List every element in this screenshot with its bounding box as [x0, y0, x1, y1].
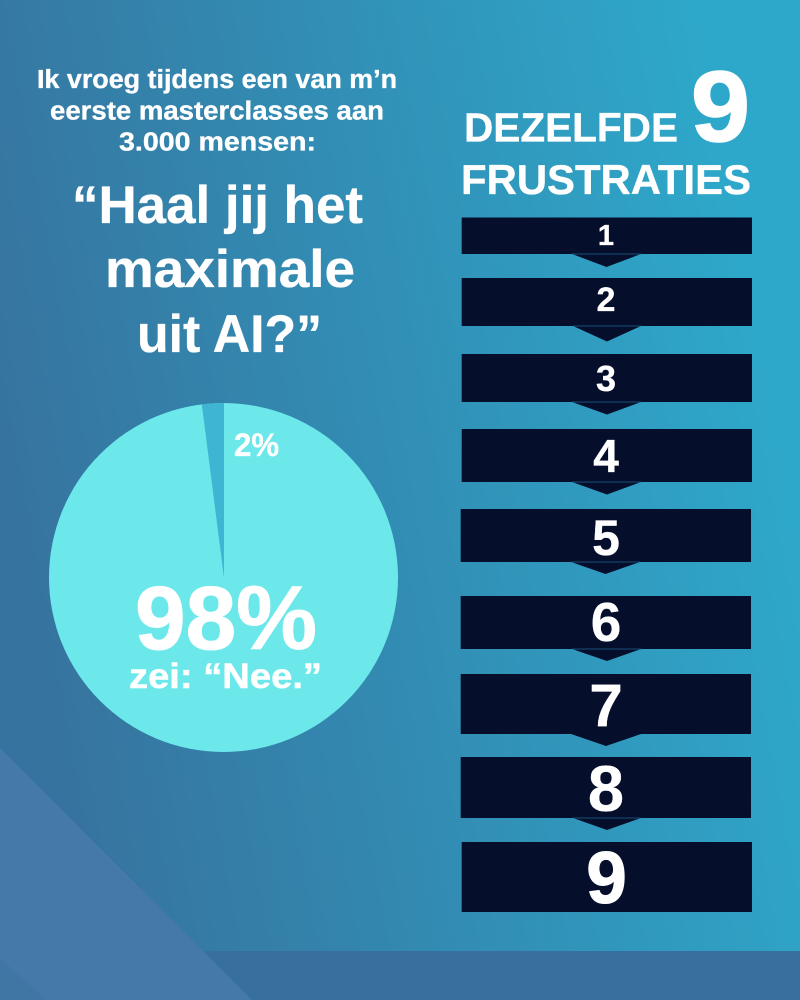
pie slice: 2% [202, 403, 224, 578]
intro text [37, 66, 397, 157]
step 1 [462, 218, 752, 267]
intro text: Ik vroeg tijdens een van m’n [37, 66, 397, 94]
step 6: 6 [591, 591, 621, 653]
step 1: 1 [598, 220, 614, 252]
intro text: 3.000 mensen: [119, 129, 316, 157]
step 3: 3 [596, 358, 616, 399]
headline quote [72, 176, 363, 364]
heading: dezelfde 9 frustraties [461, 51, 751, 203]
intro text: eerste masterclasses aan [50, 98, 384, 126]
step 4: 4 [593, 430, 619, 482]
step 3 [462, 354, 752, 414]
step 4 [462, 429, 752, 494]
bottom band [0, 951, 800, 1000]
frustration ladder [461, 218, 752, 919]
step 9: 9 [586, 838, 627, 919]
step 8 [461, 752, 751, 830]
corner triangle [0, 748, 252, 1000]
step 2: 2 [597, 281, 615, 319]
small corner triangle [0, 958, 46, 1000]
step 6 [461, 591, 751, 661]
pie chart [49, 403, 398, 752]
step 7 [461, 672, 751, 746]
headline quote: “Haal jij het [72, 176, 363, 235]
step 2 [462, 278, 752, 342]
label: 98%: 98% [135, 569, 317, 669]
heading: dezelfde 9 frustraties: FRUSTRATIES [461, 156, 751, 203]
heading: dezelfde 9 frustraties: DEZELFDE [464, 105, 678, 151]
pie slice: 98% [49, 403, 398, 752]
step 5: 5 [592, 510, 620, 566]
step 8: 8 [588, 752, 624, 825]
label: 2%: 2% [234, 427, 279, 463]
headline quote: uit AI?” [137, 305, 322, 364]
heading: dezelfde 9 frustraties: 9 [691, 51, 750, 163]
label: zei Nee: zei: “Nee.” [129, 657, 322, 696]
step 9 [462, 838, 752, 919]
headline quote: maximale [105, 240, 355, 299]
step 7: 7 [589, 672, 623, 739]
step 5 [461, 509, 751, 574]
